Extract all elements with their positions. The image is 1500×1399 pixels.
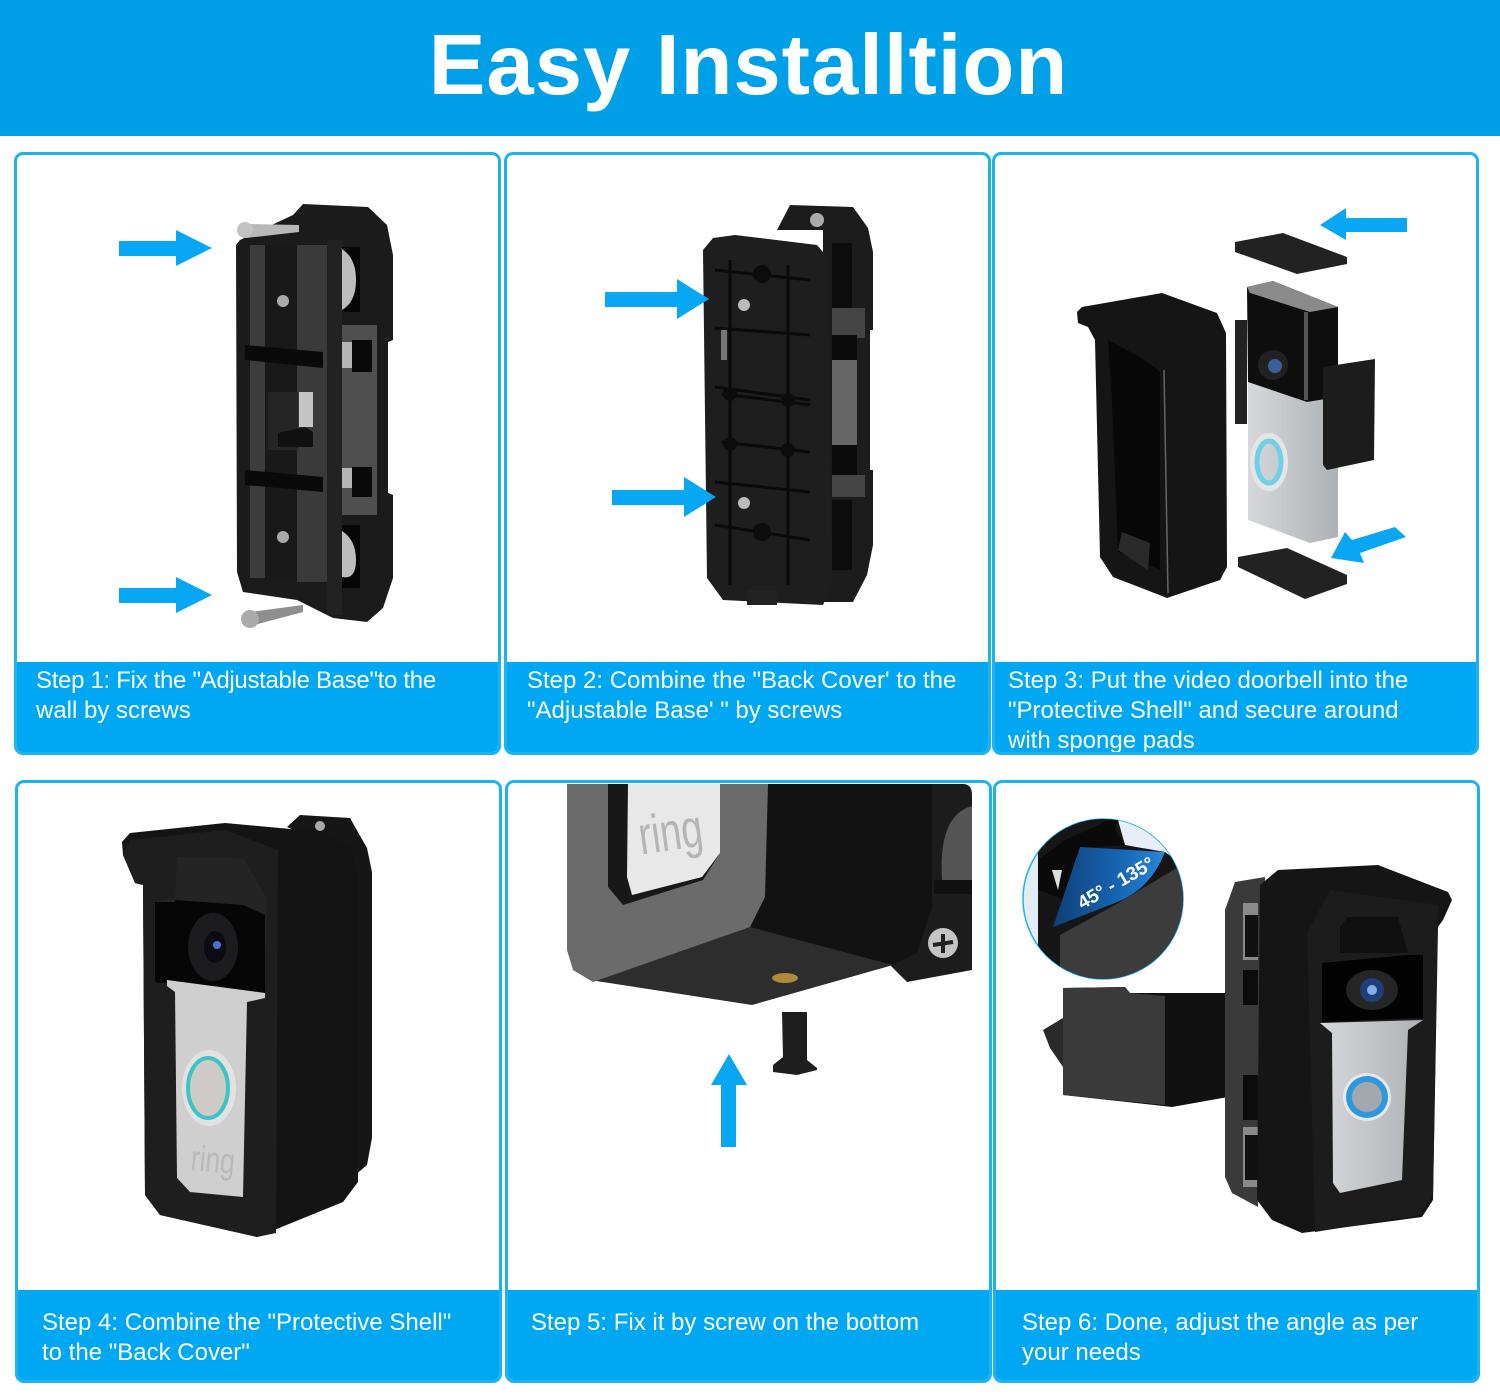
panel: step 5 — [505, 780, 992, 1383]
illustrations — [119, 204, 1452, 1237]
title: Easy Installtion — [429, 18, 1068, 113]
caption: step 1: Step 1: Fix the "Adjustable Base"to the — [36, 667, 436, 694]
icon: screw — [773, 1012, 817, 1075]
inset: rotation angle: 45° - 135° — [1074, 853, 1158, 914]
title banner — [0, 0, 1500, 136]
caption: step 3: "Protective Shell" and secure around — [1008, 697, 1399, 724]
illustration: doorbell in shell: ring — [189, 1137, 237, 1182]
caption: step 3: Step 3: Put the video doorbell into the — [1008, 667, 1408, 694]
arrows: step 1 — [119, 230, 212, 613]
arrow: step 5 — [711, 1054, 747, 1147]
panel: step 6 — [993, 780, 1480, 1383]
inset: rotation angle — [1022, 818, 1184, 980]
illustration: shell bottom view — [567, 784, 972, 1005]
caption: step 6: Step 6: Done, adjust the angle as per — [1022, 1309, 1418, 1336]
caption: step 6: your needs — [1022, 1339, 1141, 1366]
illustration: shell, doorbell and sponge pads — [1077, 233, 1375, 599]
illustration: adjustable base with screws — [236, 204, 393, 628]
caption: step 6 — [996, 1290, 1477, 1380]
caption: step 3 — [995, 662, 1476, 752]
caption: step 2 — [507, 662, 988, 752]
illustration: shell bottom view: ring — [635, 798, 706, 866]
caption: step 2: Step 2: Combine the "Back Cover' to the — [527, 667, 956, 694]
panel: step 2 — [504, 152, 991, 755]
illustration: back cover on base — [703, 205, 873, 605]
panel: step 3 — [992, 152, 1479, 755]
panel: step 1 — [14, 152, 501, 755]
caption: step 2: "Adjustable Base' " by screws — [527, 697, 842, 724]
caption: step 5 — [508, 1290, 989, 1380]
illustration: mounted doorbell at angle — [1043, 865, 1452, 1233]
caption: step 3: with sponge pads — [1008, 727, 1195, 754]
caption: step 1 — [17, 662, 498, 752]
caption: step 1: wall by screws — [36, 697, 191, 724]
caption: step 4: Step 4: Combine the "Protective Shell" — [42, 1309, 451, 1336]
caption: step 4: to the "Back Cover" — [42, 1339, 250, 1366]
arrows: step 3 — [1320, 208, 1407, 563]
panel: step 4 — [15, 780, 502, 1383]
caption: step 5: Step 5: Fix it by screw on the bottom — [531, 1309, 919, 1336]
caption: step 4 — [18, 1290, 499, 1380]
arrows: step 2 — [605, 279, 716, 517]
illustration: doorbell in shell — [122, 815, 372, 1237]
